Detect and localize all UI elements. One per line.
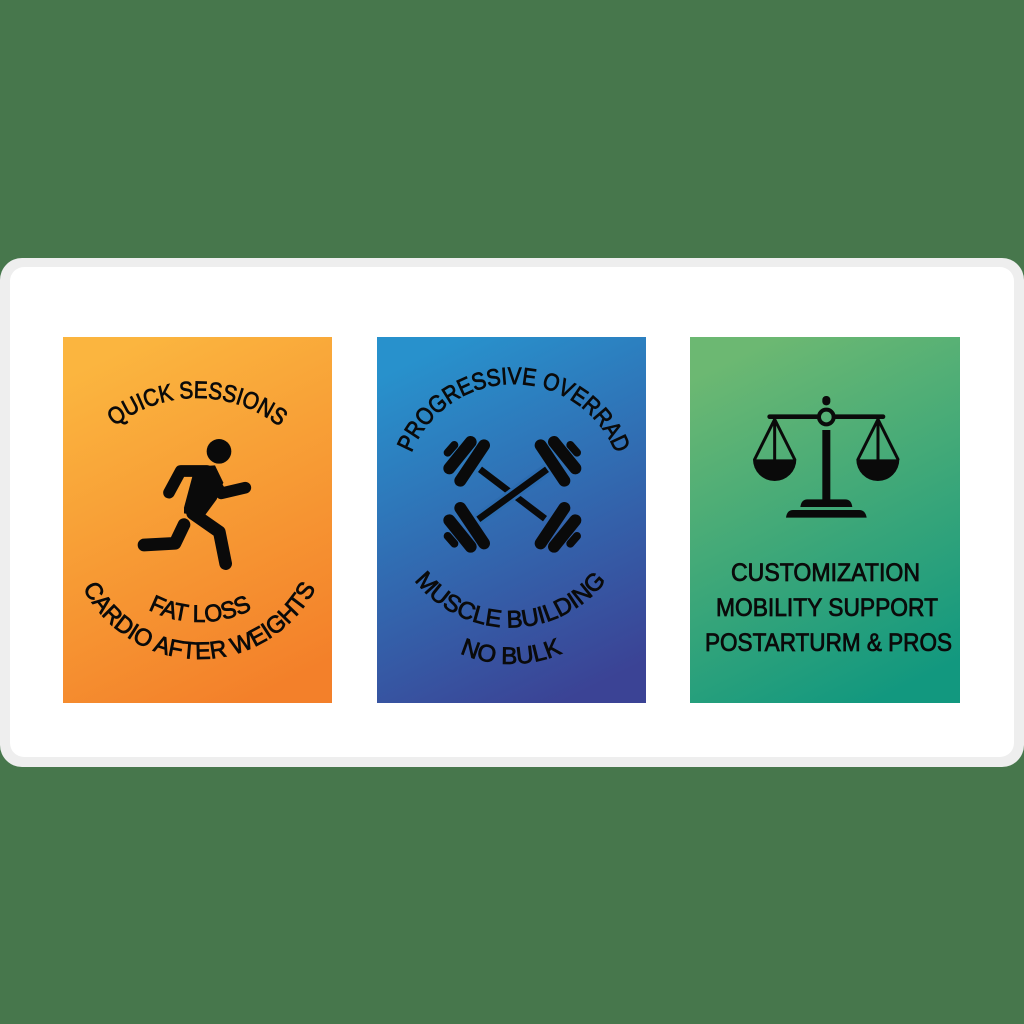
text: customization: CUSTOMIZATION — [731, 559, 920, 587]
label: fat loss: FAT LOSS — [149, 594, 250, 622]
outer card — [0, 258, 1024, 767]
label: muscle building: MUSCLE BUILDING — [415, 570, 604, 628]
label: no bulk: NO BULK — [461, 638, 564, 664]
icon: crossed dumbbells — [448, 442, 577, 547]
panel: fat loss — [63, 337, 332, 703]
heading: progressive overload: PROGRESSIVE OVERRAD — [396, 367, 629, 452]
icon: balance scale — [753, 396, 899, 518]
heading: quick sessions: QUICK SESSIONS — [108, 381, 288, 425]
text: postarturm and pros: POSTARTURM & PROS — [705, 629, 952, 657]
panel: muscle building — [377, 337, 646, 703]
text: mobility support: MOBILITY SUPPORT — [716, 594, 938, 622]
label: cardio after weights: CARDIO AFTER WEIGHTS — [85, 582, 314, 660]
icon: runner — [144, 439, 245, 564]
panel: customization — [690, 337, 960, 703]
